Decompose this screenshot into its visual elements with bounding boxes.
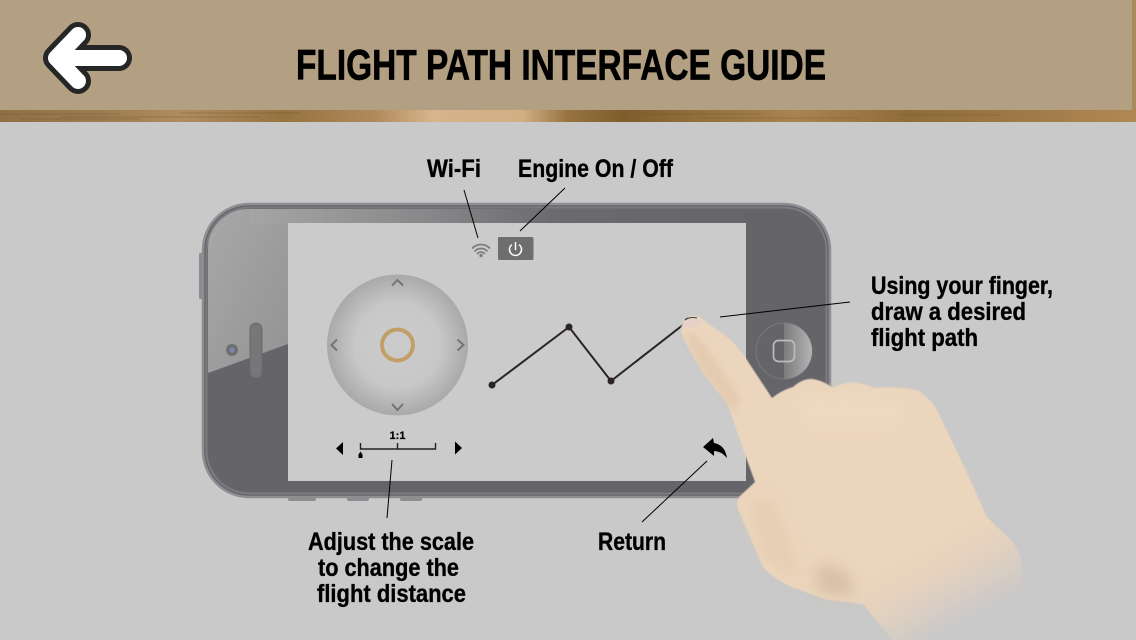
- callout: adjust scale: flight distance: [317, 580, 466, 608]
- callout: draw flight path: Using your finger,: [871, 272, 1053, 300]
- callout: adjust scale: [308, 460, 474, 608]
- callout: draw flight path: draw a desired: [871, 298, 1026, 326]
- callout: wifi: [427, 155, 481, 238]
- phone: [199, 204, 830, 501]
- callout: return: Return: [598, 528, 666, 556]
- phone top band: [250, 209, 760, 223]
- icon: camera: [226, 344, 238, 356]
- callout: return: [598, 461, 707, 556]
- phone body: [203, 204, 830, 497]
- icon: speaker: [250, 323, 262, 378]
- callout: adjust scale: Adjust the scale: [308, 528, 474, 556]
- scale value: 1:1: [390, 430, 405, 442]
- title: FLIGHT PATH INTERFACE GUIDE: [296, 42, 826, 90]
- fingernail: [683, 318, 703, 328]
- wrist crease shading: [815, 564, 853, 598]
- palm shading: [750, 495, 800, 583]
- right arrow: [455, 442, 462, 454]
- center ring: [382, 330, 413, 360]
- callout: engine: [518, 155, 674, 231]
- icon: back arrow: [56, 35, 119, 81]
- callout: adjust scale: to change the: [318, 554, 459, 582]
- phone glass highlight: [208, 209, 288, 373]
- direction arrows: [332, 280, 464, 410]
- finger shading: [685, 332, 740, 412]
- scale slider: [336, 430, 462, 458]
- home button: [756, 323, 812, 379]
- knuckle highlight: [790, 392, 915, 430]
- phone screen: [288, 223, 746, 481]
- flight path line: [488, 318, 692, 388]
- icon: return arrow: [703, 438, 727, 458]
- phone rim: [206, 208, 826, 494]
- header banner: [0, 0, 1136, 122]
- callout: draw flight path: flight path: [871, 324, 978, 352]
- callout: draw flight path: [720, 272, 1053, 352]
- scale bar: [360, 443, 436, 449]
- side and bottom buttons: [199, 253, 422, 501]
- callout: engine: Engine On / Off: [518, 155, 674, 183]
- callout: wifi: Wi-Fi: [427, 155, 481, 183]
- joystick: [327, 274, 468, 416]
- hand pointing: [681, 316, 1024, 640]
- scale marker: [358, 452, 362, 458]
- icon: power button: [498, 237, 534, 260]
- left arrow: [336, 442, 343, 455]
- icon: wifi: [472, 244, 490, 257]
